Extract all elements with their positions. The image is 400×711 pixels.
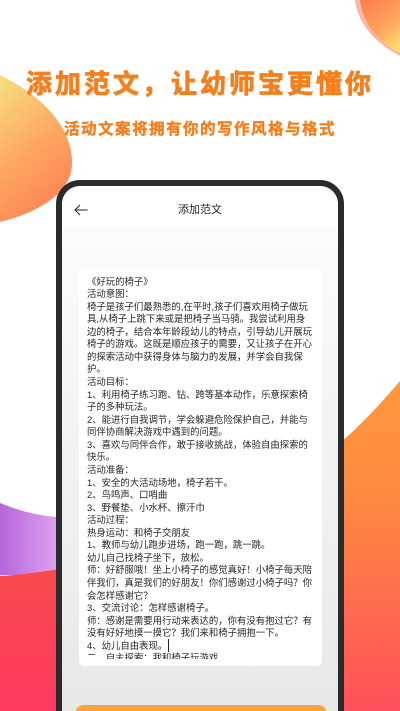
- sample essay text: 师：好舒服哦！坐上小椅子的感觉真好！小椅子每天陪: [87, 564, 312, 575]
- sample essay text: 活动目标：: [87, 376, 134, 387]
- screen title: 添加范文: [178, 204, 222, 216]
- sample essay text: 的探索活动中获得身体与脑力的发展，并学会自我保: [87, 351, 303, 362]
- sample essay text: 活动意图：: [87, 288, 134, 299]
- sample essay text: 《好玩的椅子》: [87, 276, 153, 286]
- sample essay text: 具,从椅子上跳下来或是把椅子当马骑。我尝试利用身: [87, 313, 305, 324]
- phone mockup: [56, 180, 344, 711]
- sample essay text: 椅子是孩子们最熟悉的,在平时,孩子们喜欢用椅子做玩: [87, 301, 308, 312]
- decorative blob: bottom left red: [0, 569, 60, 711]
- decorative blob: bottom left purple: [0, 503, 60, 575]
- sample essay text: 2、能进行自我调节，学会躲避危险保护自己，并能与: [87, 414, 308, 425]
- decorative blob: left: [0, 75, 72, 222]
- title: 添加范文，让幼师宝更懂你: [26, 69, 374, 99]
- text caret: [168, 639, 169, 652]
- sample essay text: 3、野餐垫、小水杯、擦汗巾: [87, 502, 205, 513]
- sample essay text: 快乐。: [87, 451, 115, 462]
- decorative blob: top right: [355, 0, 400, 56]
- sample essay text: 活动过程：: [87, 514, 134, 525]
- sample essay text: 椅子的游戏。这既是顺应孩子的需要，又让孩子在开心: [87, 338, 312, 349]
- sample essay text: 1、教师与幼儿跑步进场，跑一跑，跳一跳。: [87, 539, 270, 550]
- sample essay text: 3、交流讨论：怎样感谢椅子。: [87, 602, 214, 613]
- sample essay text: 护。: [87, 363, 106, 374]
- decorative blob: right orange: [340, 381, 400, 711]
- icon: back arrow: [74, 204, 88, 216]
- orange action button: [74, 705, 326, 711]
- sample essay text: 1、利用椅子练习跑、钻、跨等基本动作，乐意探索椅: [87, 389, 308, 400]
- sample essay text: 会怎样感谢它？: [87, 590, 153, 601]
- sample essay text: 子的多种玩法。: [87, 401, 153, 412]
- sample essay text: 3、喜欢与同伴合作，敢于接收挑战，体验自由探索的: [87, 439, 308, 450]
- sample essay text: 师：感谢是需要用行动来表达的，你有没有抱过它？有: [87, 615, 312, 626]
- sample essay text: 幼儿自己找椅子坐下，放松。: [87, 552, 209, 563]
- sample essay text: 2、鸟鸣声、口哨曲: [87, 489, 167, 500]
- sample essay text: 4、幼儿自由表现。: [87, 640, 167, 651]
- sample essay text: 没有好好地摸一摸它？我们来和椅子拥抱一下。: [87, 627, 284, 638]
- sample essay text: 边的椅子，结合本年龄段幼儿的特点，引导幼儿开展玩: [87, 326, 312, 337]
- app header bar: [62, 186, 338, 227]
- sample essay text: 1、安全的大活动场地，椅子若干。: [87, 476, 233, 488]
- sample essay text: 热身运动：和椅子交朋友: [87, 527, 190, 538]
- sample essay text: 活动准备：: [87, 464, 134, 475]
- sample essay text: 伴我们，真是我们的好朋友！你们感谢过小椅子吗？你: [87, 577, 312, 588]
- text card: [78, 268, 322, 666]
- sample essay text: [87, 276, 312, 659]
- sample essay text: 同伴协商解决游戏中遇到的问题。: [87, 426, 228, 437]
- subtitle: 活动文案将拥有你的写作风格与格式: [64, 121, 336, 138]
